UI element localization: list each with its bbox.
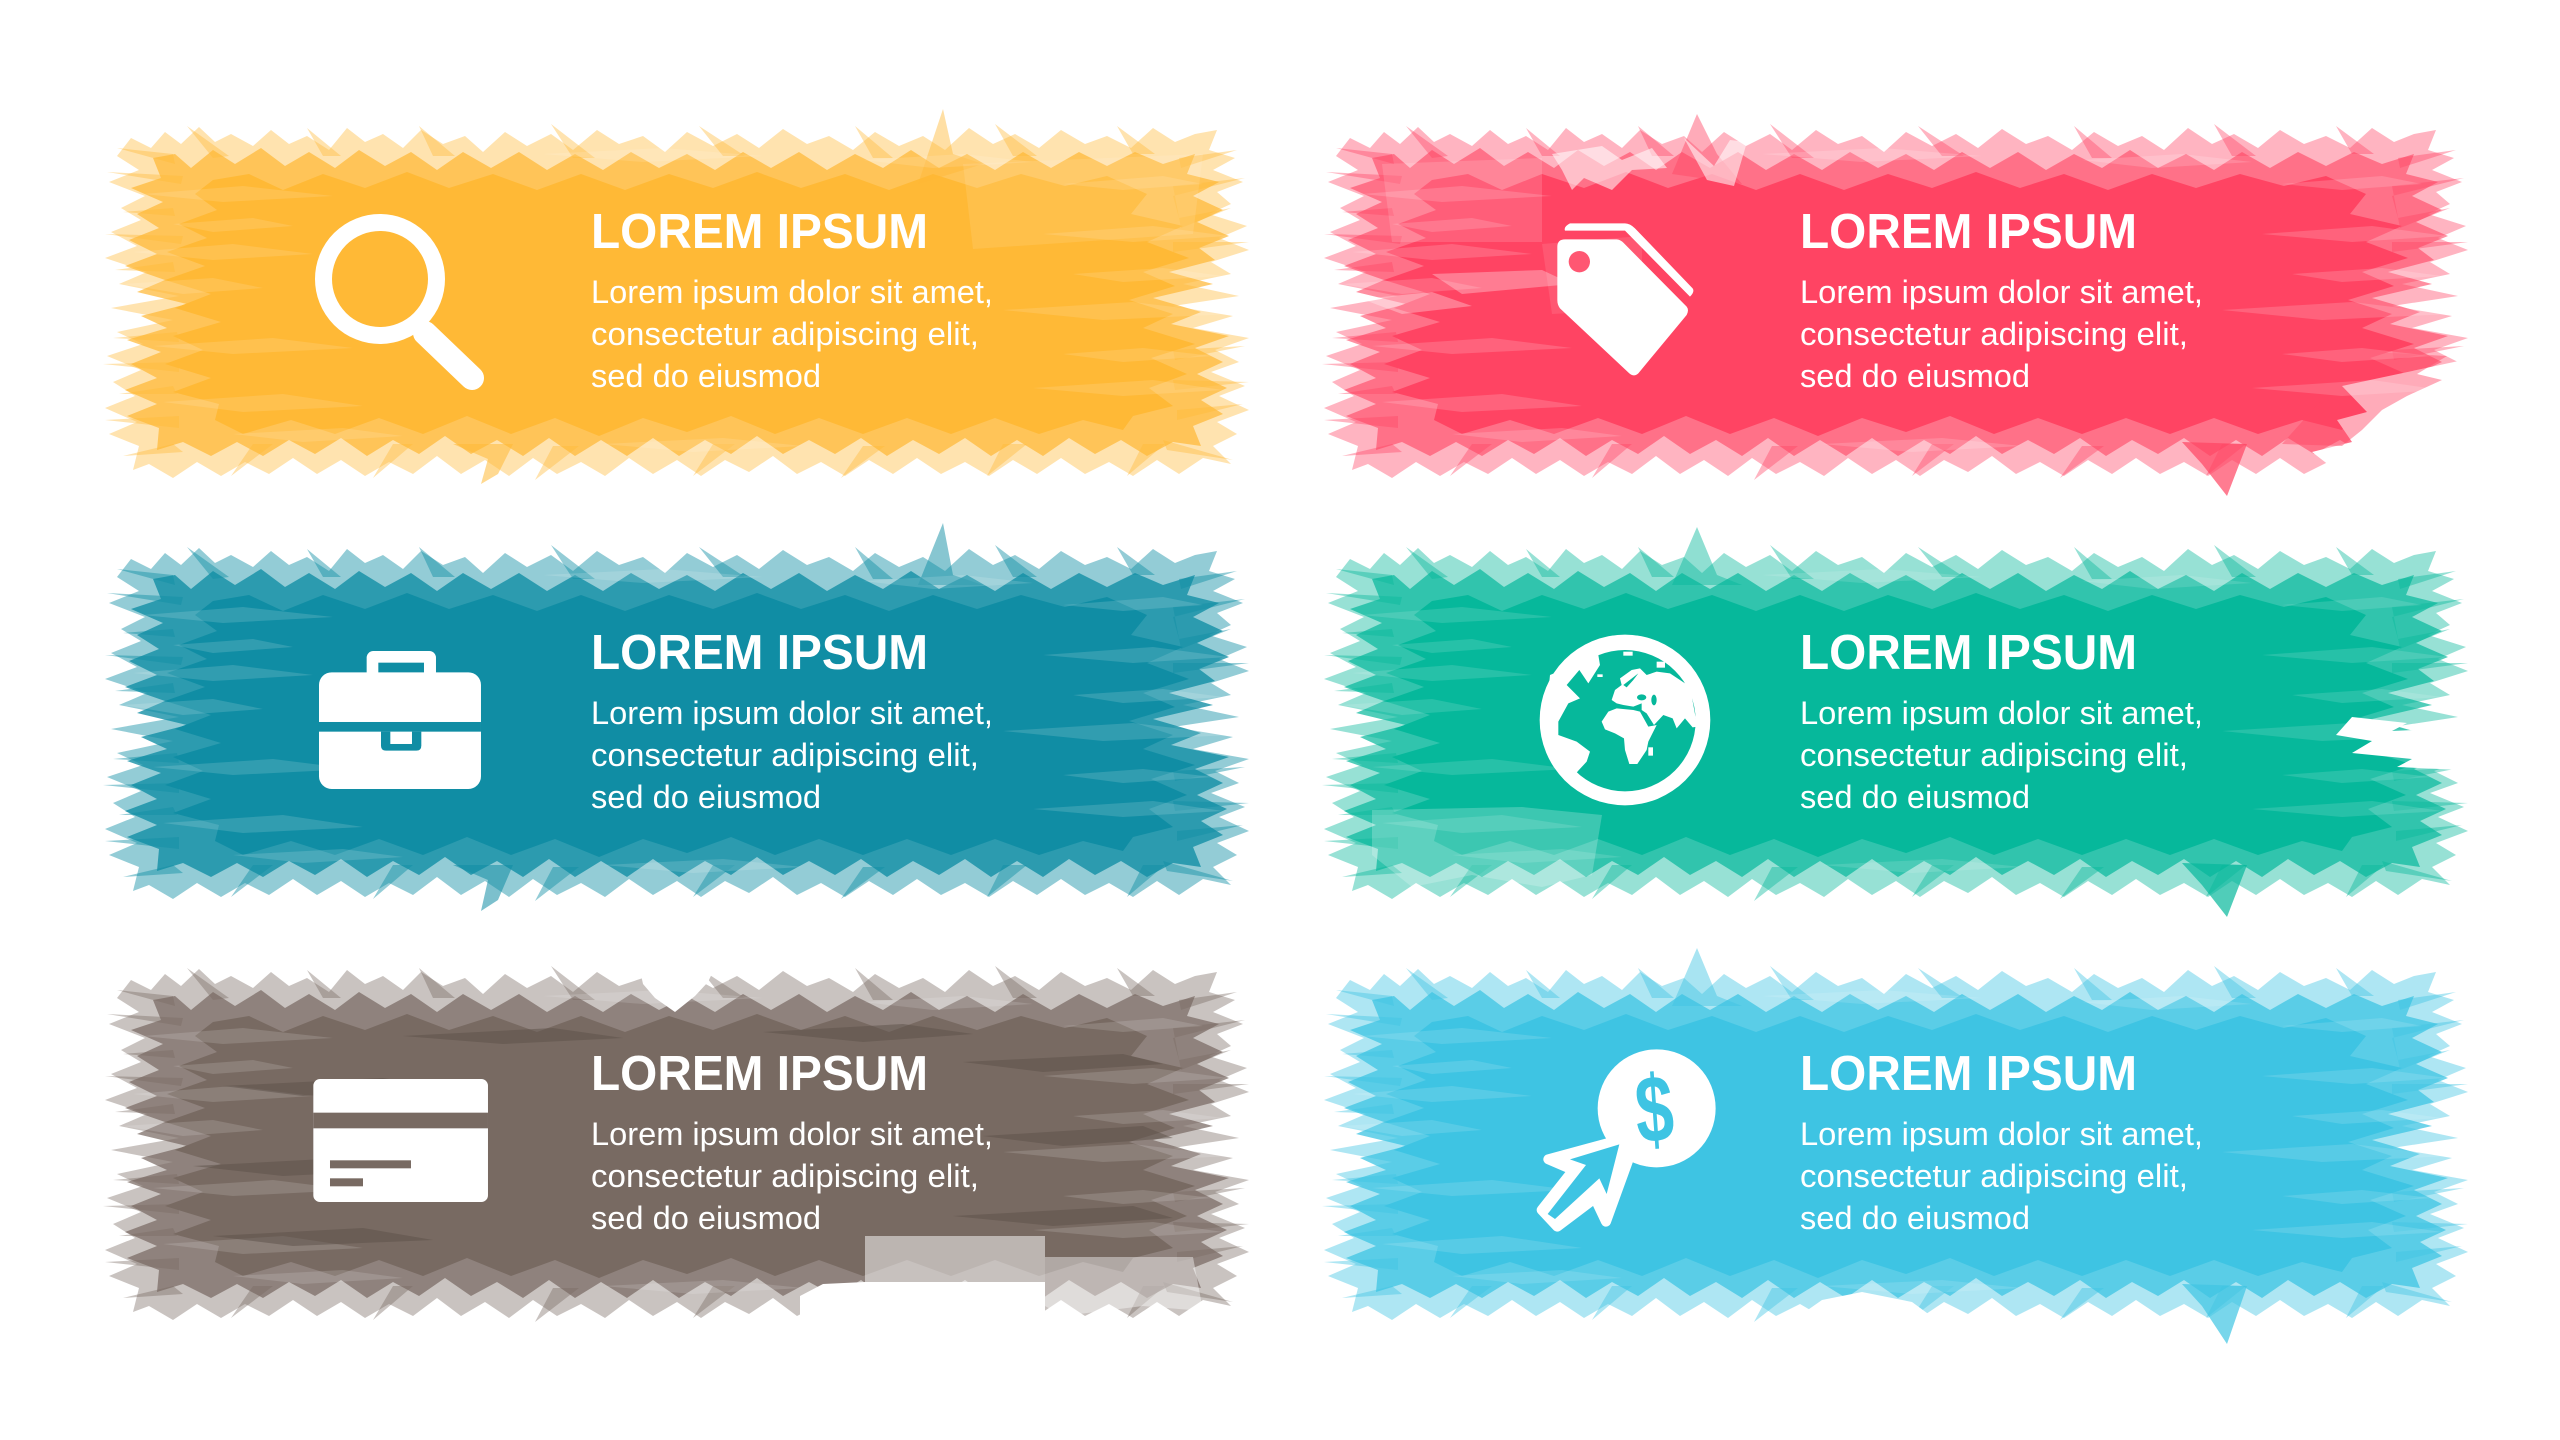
text block: Lorem ipsum dolor sit amet, (591, 1115, 993, 1152)
text block: Lorem ipsum dolor sit amet, (1800, 694, 2203, 731)
icon: magnifying glass (324, 222, 472, 378)
heading: LOREM IPSUM (1800, 625, 2137, 680)
text block: Lorem ipsum dolor sit amet, (591, 273, 993, 310)
panel: teal briefcase (103, 523, 1249, 911)
heading: LOREM IPSUM (591, 625, 928, 680)
icon: globe (1540, 635, 1710, 805)
brush background: yellow (103, 109, 1249, 484)
text block: sed do eiusmod (591, 778, 821, 815)
heading: LOREM IPSUM (1800, 204, 2137, 259)
panel: blue dollar cursor (1322, 948, 2468, 1344)
panel: yellow search (103, 109, 1249, 484)
text block: Lorem ipsum dolor sit amet, (1800, 1115, 2203, 1152)
heading: LOREM IPSUM (591, 204, 928, 259)
icon: price tag (1557, 223, 1693, 375)
heading: LOREM IPSUM (1800, 1046, 2137, 1101)
panel: brown credit card (103, 961, 1249, 1328)
text block: Lorem ipsum dolor sit amet, (591, 694, 993, 731)
icon: dollar cursor (1542, 1049, 1716, 1227)
icon: credit card (313, 1079, 488, 1202)
text block: sed do eiusmod (1800, 1199, 2030, 1236)
panel: green globe (1322, 527, 2482, 917)
text block: sed do eiusmod (591, 1199, 821, 1236)
text block: consectetur adipiscing elit, (591, 736, 979, 773)
text block: sed do eiusmod (591, 357, 821, 394)
panel: red tag (1322, 114, 2482, 496)
brush background: blue (1322, 948, 2468, 1344)
icon: briefcase (319, 651, 481, 789)
brush background: brown (103, 961, 1249, 1328)
text block: consectetur adipiscing elit, (1800, 1157, 2188, 1194)
icon: dollar cursor: $ (1632, 1054, 1677, 1164)
brush background: teal (103, 523, 1249, 911)
heading: LOREM IPSUM (591, 1046, 928, 1101)
text block: consectetur adipiscing elit, (591, 1157, 979, 1194)
text block: consectetur adipiscing elit, (591, 315, 979, 352)
text block: sed do eiusmod (1800, 778, 2030, 815)
brush background: red (1322, 114, 2482, 496)
text block: Lorem ipsum dolor sit amet, (1800, 273, 2203, 310)
text block: consectetur adipiscing elit, (1800, 315, 2188, 352)
text block: sed do eiusmod (1800, 357, 2030, 394)
brush background: green (1322, 527, 2482, 917)
text block: consectetur adipiscing elit, (1800, 736, 2188, 773)
